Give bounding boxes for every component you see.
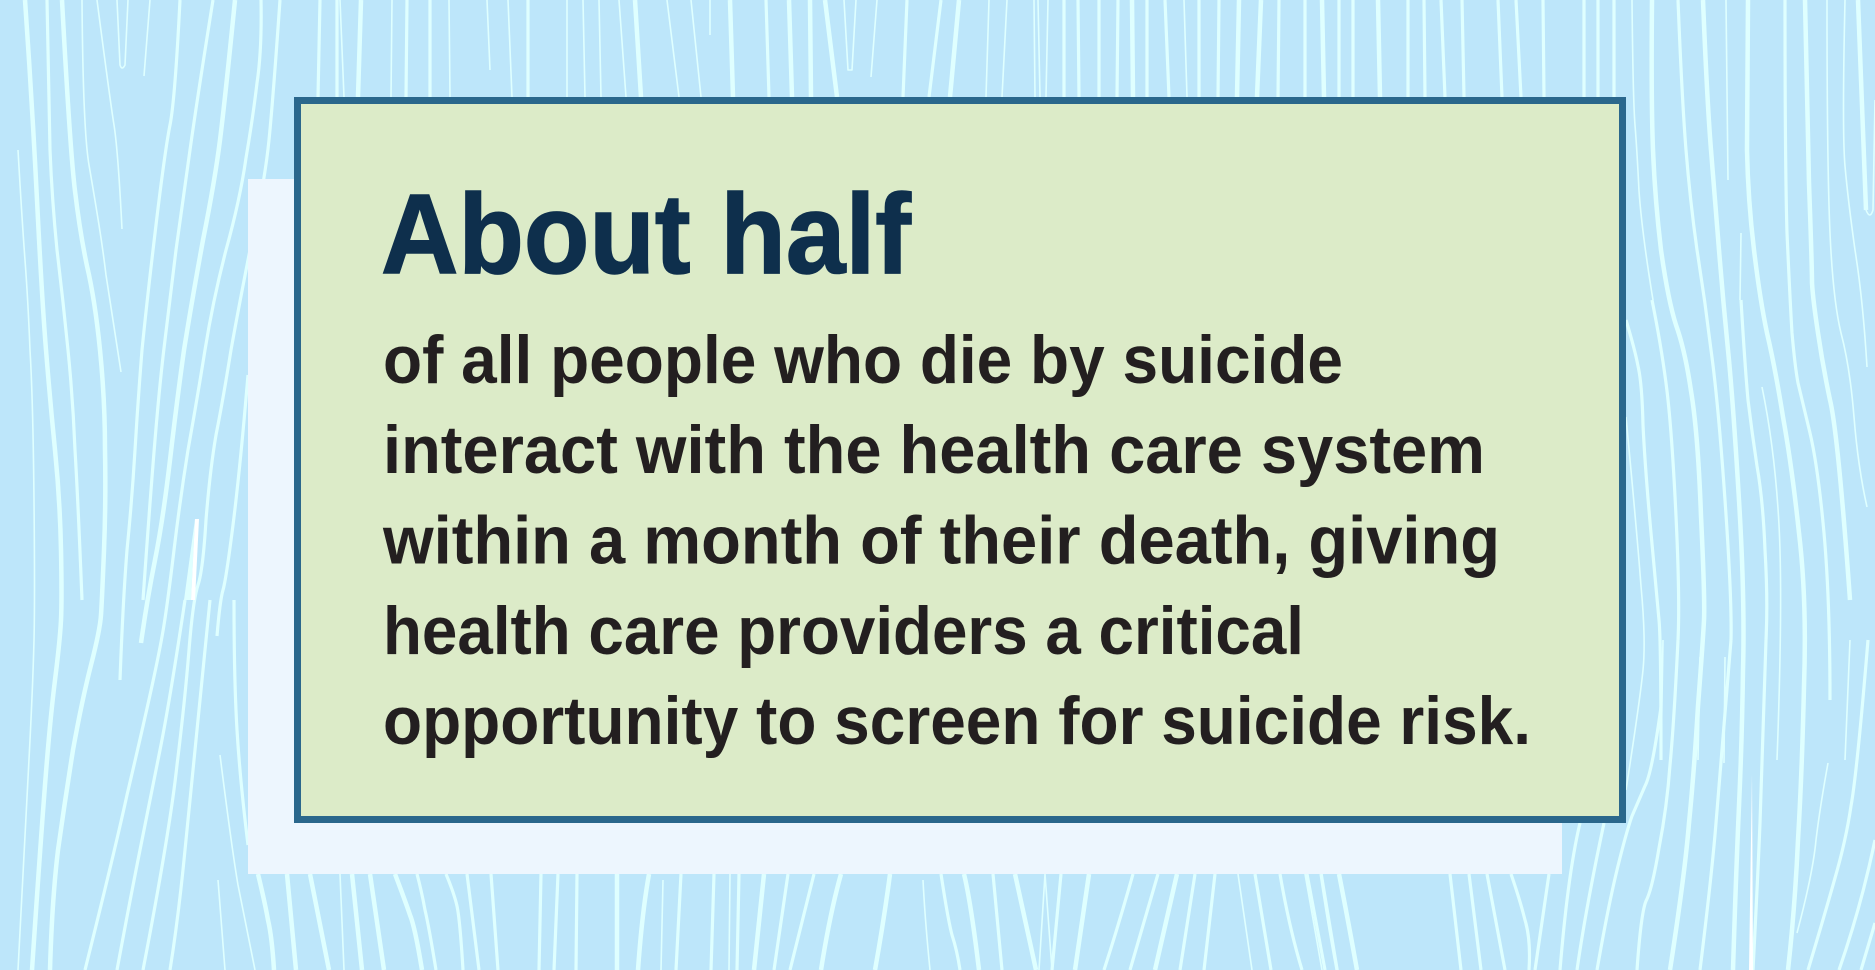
body text: opportunity to screen for suicide risk. [383,683,1531,759]
heading: About half [381,171,911,297]
body text: interact with the health care system [383,412,1485,488]
body text: health care providers a critical [383,593,1304,669]
body text: of all people who die by suicide [383,322,1343,398]
main green panel with blue border [298,100,1622,820]
body text: within a month of their death, giving [382,502,1500,578]
offset pale shadow panel [248,179,1562,874]
body text [382,322,1531,759]
